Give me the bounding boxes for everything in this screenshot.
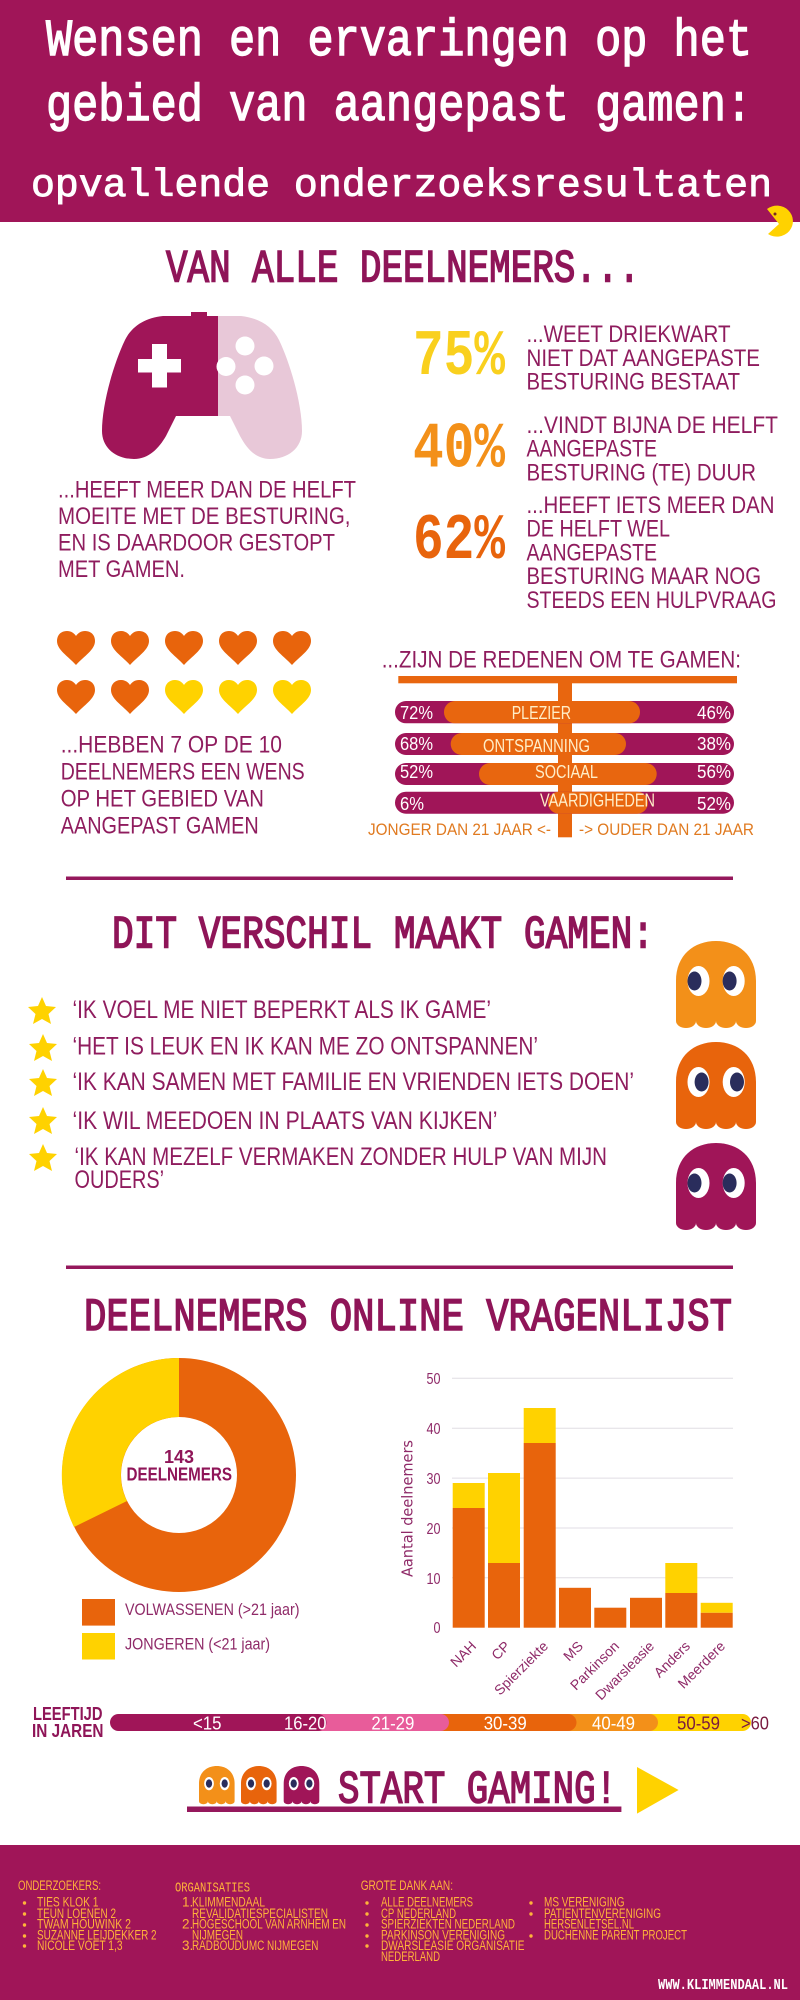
footer: grote dank aan: PARKINSON VERENIGING [381, 1927, 505, 1942]
footer: grote dank aan: PATIENTENVERENIGING [544, 1906, 661, 1921]
stat: 62%: 62% [413, 504, 506, 578]
footer: organisaties: KLIMMENDAAL [192, 1895, 265, 1910]
stat: 62%: BESTURING MAAR NOG [526, 563, 761, 590]
icon: dark orange ghost [676, 1042, 756, 1129]
footer: onderzoekers: ONDERZOEKERS: [18, 1878, 101, 1893]
footer panel [0, 1845, 800, 2000]
heading: dit verschil maakt gamen: DIT VERSCHIL MAAKT GAMEN: [112, 910, 654, 962]
row: vaardigheden [395, 791, 734, 814]
title banner [0, 0, 800, 222]
age bar labels [193, 1713, 769, 1733]
y axis labels: 20 [426, 1521, 441, 1538]
footer: grote dank aan [361, 1878, 687, 1964]
divider [66, 1266, 733, 1269]
stacked bars [453, 1408, 733, 1628]
text: 7 of 10 participants: DEELNEMERS EEN WENS [61, 759, 305, 786]
chart legend: JONGER DAN 21 JAAR <- [368, 820, 551, 839]
x axis labels: NAH [447, 1638, 479, 1670]
bar chart: participants by condition [399, 1371, 733, 1703]
arrow: play triangle [637, 1767, 679, 1814]
age bar segments [110, 1714, 751, 1731]
age bar label: IN JAREN [32, 1721, 104, 1741]
footer: onderzoekers: TWAM HOUWINK 2 [37, 1917, 131, 1932]
footer: organisaties: 2. [182, 1917, 193, 1932]
footer: organisaties [175, 1882, 346, 1953]
row: sociaal: 56% [697, 762, 731, 782]
donut legend: VOLWASSENEN (>21 jaar) [125, 1600, 300, 1619]
x axis labels: Dwarsleasie [592, 1638, 657, 1703]
chart: reasons to game [368, 647, 754, 839]
x axis labels: Anders [650, 1638, 693, 1680]
text: controller finding: ...HEEFT MEER DAN DE HELFT [58, 476, 356, 503]
age bar labels: 30-39 [484, 1713, 527, 1733]
quote 5: ‘IK KAN MEZELF VERMAKEN ZONDER HULP VAN MIJN [74, 1143, 607, 1171]
text: 7 of 10 participants [61, 731, 305, 840]
row: plezier: 72% [400, 703, 433, 723]
footer: organisaties: HOGESCHOOL VAN ARNHEM EN [192, 1917, 346, 1932]
icon: game controller [102, 312, 302, 459]
chart legend: -> OUDER DAN 21 JAAR [579, 820, 754, 839]
footer: grote dank aan: SPIERZIEKTEN NEDERLAND [381, 1917, 515, 1932]
row: plezier: 46% [697, 703, 731, 723]
footer: grote dank aan: MS VERENIGING [544, 1895, 624, 1910]
icon: pac-man [767, 206, 793, 237]
stat: 75%: ...WEET DRIEKWART [526, 321, 731, 348]
stat: 40%: BESTURING (TE) DUUR [526, 459, 756, 486]
age bar labels: >60 [741, 1713, 769, 1733]
row: plezier: PLEZIER [512, 703, 571, 723]
stat: 75%: 75% [413, 320, 506, 394]
footer: grote dank aan: DUCHENNE PARENT PROJECT [544, 1927, 687, 1942]
footer: grote dank aan: GROTE DANK AAN: [361, 1878, 453, 1893]
quote 1: ‘IK VOEL ME NIET BEPERKT ALS IK GAME’ [72, 996, 491, 1024]
age bar label: LEEFTIJD [33, 1704, 102, 1724]
text: 7 of 10 participants: ...HEBBEN 7 OP DE 10 [61, 731, 282, 758]
footer: grote dank aan: DWARSLEASIE ORGANISATIE [381, 1938, 524, 1953]
stat: 40%: 40% [413, 413, 506, 487]
divider [66, 876, 733, 880]
stat: 75%: BESTURING BESTAAT [526, 368, 740, 396]
quote 4: ‘IK WIL MEEDOEN IN PLAATS VAN KIJKEN’ [72, 1107, 498, 1135]
stat: 40% [413, 412, 778, 487]
text: controller finding [58, 476, 356, 583]
x axis labels [447, 1638, 728, 1703]
footer: organisaties: 3. [182, 1938, 193, 1953]
row: sociaal: 52% [400, 762, 433, 782]
row: sociaal [395, 762, 734, 785]
footer: onderzoekers: NICOLE VOET 1,3 [37, 1938, 122, 1953]
quote 5: OUDERS’ [74, 1166, 164, 1194]
row: ontspanning: 68% [400, 734, 433, 754]
quote 5 [29, 1143, 607, 1194]
donut chart: 143 participants [62, 1358, 296, 1592]
y axis labels: 0 [434, 1620, 441, 1637]
x axis labels: Spierziekte [491, 1638, 551, 1698]
heading: van alle deelnemers: VAN ALLE DEELNEMERS... [166, 244, 640, 296]
stat: 62% [413, 492, 776, 614]
row: ontspanning: 38% [697, 734, 731, 754]
chart axis bars [398, 676, 737, 837]
y axis labels [426, 1371, 441, 1637]
donut chart: 143 participants: DEELNEMERS [126, 1465, 232, 1485]
x axis labels: CP [488, 1638, 513, 1663]
y axis labels: 40 [426, 1421, 441, 1438]
donut chart: 143 participants: 143 [164, 1447, 194, 1467]
x axis labels: Meerdere [674, 1638, 728, 1691]
icon: three small ghosts [199, 1766, 319, 1804]
footer: organisaties: NIJMEGEN [192, 1927, 243, 1942]
row: vaardigheden: 52% [697, 794, 731, 814]
footer: grote dank aan: ALLE DEELNEMERS [381, 1895, 473, 1910]
text: 7 of 10 participants: AANGEPAST GAMEN [61, 813, 259, 840]
chart heading: ...ZIJN DE REDENEN OM TE GAMEN: [382, 647, 741, 674]
footer: organisaties: RADBOUDUMC NIJMEGEN [192, 1938, 318, 1953]
footer: onderzoekers [18, 1878, 157, 1953]
age bar labels: 40-49 [592, 1713, 635, 1733]
y axis labels: 50 [426, 1371, 441, 1388]
text: controller finding: MOEITE MET DE BESTURING, [58, 503, 350, 530]
title banner: opvallende onderzoeksresultaten [31, 164, 772, 208]
icons: ten hearts [57, 631, 311, 714]
age bar [32, 1704, 769, 1741]
row: vaardigheden: VAARDIGHEDEN [540, 791, 655, 811]
age bar labels: 50-59 [677, 1713, 720, 1733]
age bar labels: 16-20 [284, 1713, 326, 1733]
chart legend [368, 820, 754, 839]
footer: onderzoekers: SUZANNE LEIJDEKKER 2 [37, 1927, 157, 1942]
row: plezier [395, 701, 734, 723]
row: vaardigheden: 6% [400, 794, 424, 814]
footer: organisaties: REVALIDATIESPECIALISTEN [192, 1906, 328, 1921]
footer: grote dank aan: HERSENLETSEL.NL [544, 1917, 634, 1932]
x axis labels: Parkinson [567, 1638, 622, 1693]
row: ontspanning: ONTSPANNING [483, 736, 590, 756]
footer: grote dank aan: NEDERLAND [381, 1949, 440, 1964]
row: sociaal: SOCIAAL [535, 762, 598, 782]
row: ontspanning [395, 733, 734, 756]
text: 7 of 10 participants: OP HET GEBIED VAN [61, 786, 264, 813]
stat: 40%: AANGEPASTE [526, 436, 657, 463]
footer: grote dank aan: CP NEDERLAND [381, 1906, 456, 1921]
icon: maroon ghost [676, 1143, 756, 1230]
stat: 62%: DE HELFT WEL [526, 516, 670, 543]
x axis labels: MS [560, 1638, 586, 1664]
y axis labels: 30 [426, 1471, 441, 1488]
y axis title: Aantal deelnemers [399, 1440, 417, 1577]
footer: onderzoekers: TIES KLOK 1 [37, 1895, 98, 1910]
age bar labels: <15 [193, 1713, 222, 1733]
age bar label [32, 1704, 104, 1741]
call to action: start gaming: START GAMING! [338, 1765, 617, 1817]
donut legend: JONGEREN (<21 jaar) [125, 1634, 270, 1654]
icon: orange ghost [676, 941, 756, 1028]
underline [187, 1806, 621, 1812]
gridlines [452, 1378, 733, 1578]
quote 3: ‘IK KAN SAMEN MET FAMILIE EN VRIENDEN IETS DOEN’ [72, 1068, 634, 1096]
stat: 75%: NIET DAT AANGEPASTE [526, 345, 760, 372]
quote 2: ‘HET IS LEUK EN IK KAN ME ZO ONTSPANNEN’ [72, 1032, 538, 1060]
donut legend [82, 1599, 300, 1660]
text: controller finding: MET GAMEN. [58, 556, 185, 583]
stat: 75% [413, 320, 760, 396]
y axis labels: 10 [426, 1571, 441, 1588]
age bar labels: 21-29 [371, 1713, 414, 1733]
footer: onderzoekers: TEUN LOENEN 2 [37, 1906, 116, 1921]
footer: organisaties: 1. [182, 1895, 193, 1910]
stat: 62%: AANGEPASTE [526, 539, 657, 566]
footer: organisaties: ORGANISATIES [175, 1882, 250, 1897]
text: controller finding: EN IS DAARDOOR GESTOPT [58, 529, 335, 556]
